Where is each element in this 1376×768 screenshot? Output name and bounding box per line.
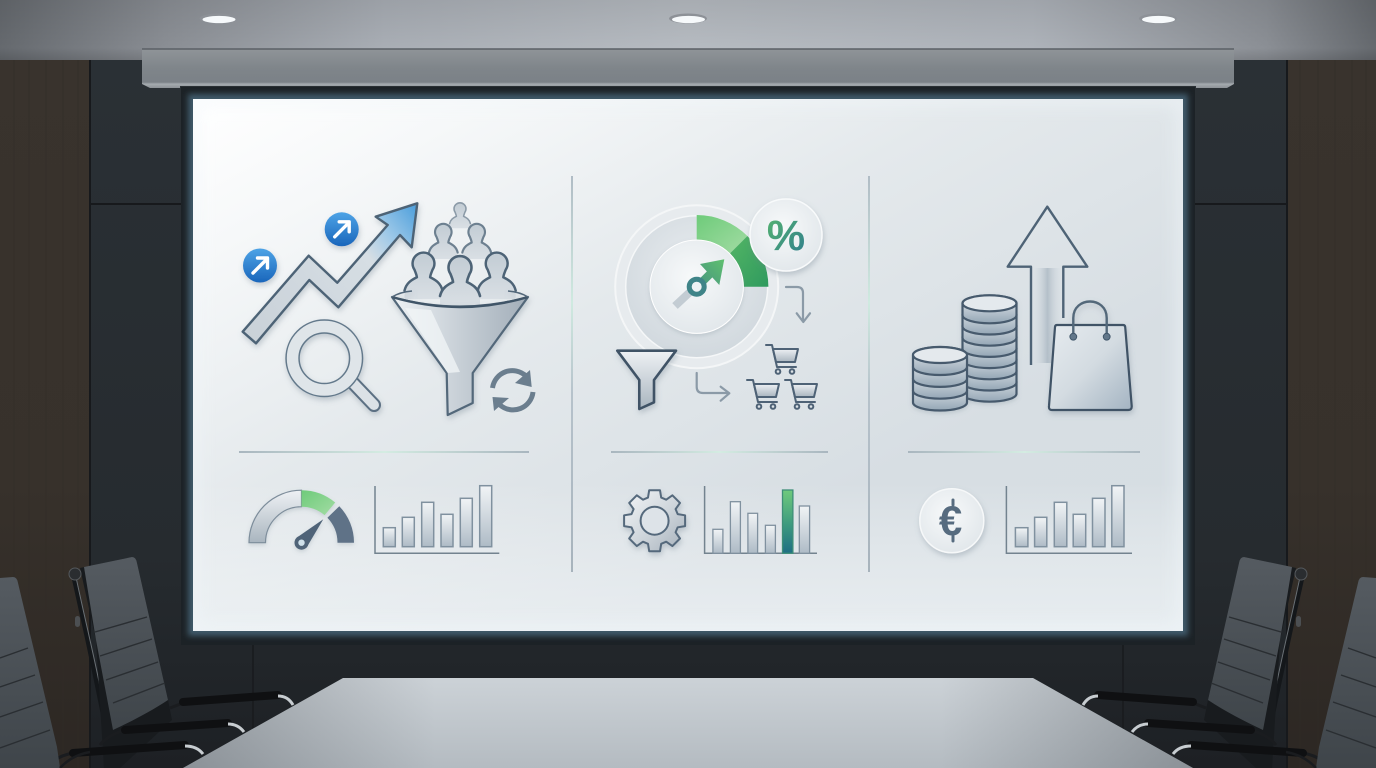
icon: blue arrow badge left: [243, 248, 277, 282]
icon: dial arrow: [675, 259, 724, 306]
icon: euro coin: [920, 489, 984, 553]
icon: rising trend arrow: [243, 203, 417, 343]
icon: speedometer gauge: [249, 490, 354, 550]
icon: group of people: [404, 203, 516, 305]
icon: refresh arrows: [492, 370, 533, 411]
panel: conversion rate: [611, 199, 828, 553]
icon: percent badge: [750, 199, 822, 271]
projector screen housing: [142, 49, 1234, 88]
icon: gear: [624, 490, 685, 551]
icon: elbow arrow right: [697, 373, 729, 401]
ceiling: [0, 0, 1376, 60]
icon: blue arrow badge right: [325, 212, 359, 246]
icon: elbow arrow down: [786, 287, 810, 322]
icon: large funnel: [392, 291, 528, 415]
chairs: right side: [1083, 557, 1376, 768]
icon: euro coin: €: [939, 497, 962, 544]
bar chart: left panel: [375, 486, 499, 553]
divider: right panel: [908, 451, 1140, 453]
projection screen: [181, 87, 1195, 645]
icon: shopping bag: [1049, 302, 1132, 410]
icon: short coin stack: [913, 347, 967, 410]
divider: middle panel: [611, 451, 828, 453]
chairs: left side: [0, 557, 293, 768]
divider: left panel: [239, 451, 529, 453]
icon: circular conversion dial: [615, 205, 778, 368]
bar chart: right panel: [1006, 486, 1132, 553]
icon: shopping cart right: [785, 380, 817, 409]
ceiling lights: [200, 14, 1177, 24]
conference table: [183, 678, 1193, 768]
icon: large up arrow: [1008, 207, 1087, 365]
icon: shopping cart left: [747, 380, 779, 409]
panel: revenue growth: [908, 207, 1140, 553]
icon: small funnel: [617, 351, 676, 409]
column dividers: [571, 176, 870, 572]
bar chart: middle panel: [705, 486, 817, 553]
icon: shopping cart top: [766, 345, 798, 374]
icon: tall coin stack: [962, 295, 1016, 402]
icon: magnifying glass: [293, 327, 374, 405]
icon: percent badge: %: [767, 212, 805, 260]
panel: traffic and funnel: [239, 203, 533, 553]
